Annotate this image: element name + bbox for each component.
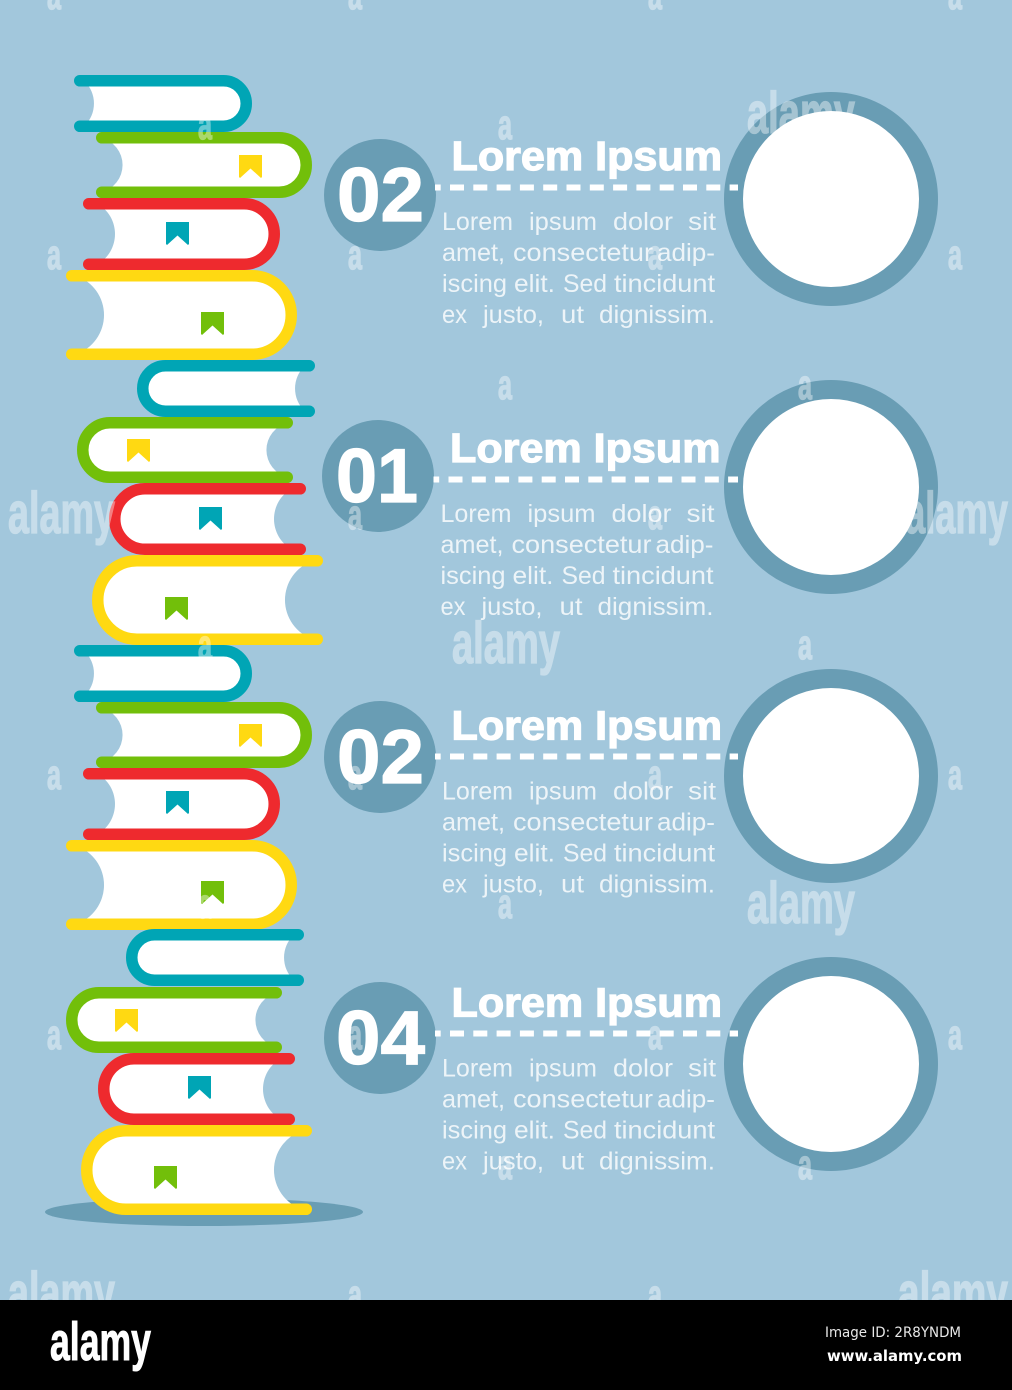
body text: Lorem (442, 208, 513, 236)
body text: Sed (563, 840, 607, 868)
watermarks: a (948, 751, 962, 798)
body text: consectetur (512, 531, 652, 559)
body text: consectetur (513, 1086, 653, 1114)
body text: elit. (514, 1116, 555, 1144)
body text: Lorem (440, 500, 512, 528)
body text: Sed (562, 562, 606, 590)
book: yellow 3 (72, 846, 291, 924)
bookmark icons (115, 155, 262, 1189)
body text: justo, (482, 301, 544, 329)
body text: elit. (512, 562, 554, 590)
step 4: 04 (324, 966, 928, 1176)
body text: Sed (563, 270, 607, 298)
watermarks: a (47, 1011, 61, 1058)
watermarks: alamy (747, 81, 855, 146)
body text: ex (442, 301, 467, 329)
watermarks: a (498, 101, 512, 148)
watermarks: a (47, 231, 61, 278)
body text: ex (440, 593, 466, 621)
watermarks: alamy (747, 871, 855, 936)
book: yellow 4 (87, 1131, 306, 1209)
body text: Sed (563, 1116, 607, 1144)
body text: justo, (480, 593, 542, 621)
body text: ipsum (528, 500, 596, 528)
heading: Lorem Ipsum (452, 980, 722, 1026)
footer bar (0, 1300, 1012, 1390)
body text: dolor (613, 1054, 673, 1082)
body text: tincidunt (614, 840, 715, 868)
number badge 02: 02 (337, 153, 424, 238)
watermarks: a (648, 231, 662, 278)
body text: iscing (442, 840, 507, 868)
step 3: 02 (324, 678, 928, 898)
body text: ut (561, 870, 584, 898)
watermarks: a (498, 880, 512, 927)
number badge 02 (324, 701, 436, 813)
book: green 4 (72, 993, 277, 1047)
book: green 2 (83, 423, 288, 477)
body text: sit (686, 500, 715, 528)
watermarks: a (648, 1011, 662, 1058)
body text: elit. (514, 270, 555, 298)
website: www.alamy.com (827, 1347, 962, 1365)
body text: amet, (442, 239, 505, 267)
number badge 02: 02 (337, 715, 424, 800)
dashed connector (435, 184, 738, 190)
watermarks: a (648, 491, 662, 538)
body text: adip- (657, 1086, 715, 1114)
body text: sit (688, 208, 716, 236)
body text: consectetur (513, 808, 653, 836)
watermarks: a (348, 1271, 362, 1318)
body text: sit (688, 1054, 716, 1082)
watermarks: alamy (452, 611, 560, 676)
body text: ut (560, 593, 583, 621)
book: teal 2 (143, 366, 309, 411)
body text: ipsum (529, 1054, 597, 1082)
watermarks: a (198, 101, 212, 148)
body text: tincidunt (614, 270, 715, 298)
number badge 01 (322, 420, 434, 532)
watermarks: a (948, 1011, 962, 1058)
body text: Lorem (442, 778, 513, 806)
number badge 02 (324, 139, 436, 251)
image id: Image ID: 2R8YNDM (825, 1325, 961, 1341)
body text: tincidunt (612, 562, 714, 590)
body text: dolor (612, 500, 672, 528)
body text: ex (442, 870, 467, 898)
watermarks: a (348, 751, 362, 798)
footer logo: alamy (50, 1312, 151, 1372)
book stack (72, 81, 317, 1209)
watermarks: a (348, 231, 362, 278)
watermarks: a (798, 621, 812, 668)
watermarks: a (198, 621, 212, 668)
body text: dignissim. (599, 301, 715, 329)
body text: dignissim. (598, 593, 714, 621)
book: red 1 (89, 204, 274, 264)
book: teal 3 (80, 651, 246, 696)
number badge 01: 01 (336, 434, 418, 519)
watermarks: a (498, 1141, 512, 1188)
body text: sit (688, 778, 716, 806)
book: red 3 (89, 774, 274, 834)
body text: consectetur (513, 239, 653, 267)
number badge 04 (324, 982, 436, 1094)
book stack shadow (45, 1198, 363, 1226)
body text: iscing (440, 562, 506, 590)
body text: tincidunt (614, 1116, 715, 1144)
watermarks: alamy (8, 481, 115, 546)
book: yellow 1 (72, 276, 291, 354)
step 2: 01 (322, 390, 928, 621)
watermarks: a (798, 361, 812, 408)
body text: amet, (440, 531, 504, 559)
watermarks: a (47, 751, 61, 798)
watermarks: a (648, 1271, 662, 1318)
body text: adip- (656, 531, 714, 559)
book: green 3 (101, 708, 306, 762)
body text: Lorem (442, 1054, 513, 1082)
number badge 04: 04 (336, 996, 425, 1081)
body text: justo, (482, 1148, 544, 1176)
watermarks: a (198, 880, 212, 927)
body text: adip- (657, 808, 715, 836)
body text: amet, (442, 808, 505, 836)
image placeholder ring (734, 390, 928, 584)
body text: amet, (442, 1086, 505, 1114)
body text: justo, (482, 870, 544, 898)
book: teal 4 (132, 935, 298, 980)
body text: dolor (613, 208, 673, 236)
book: red 4 (104, 1059, 289, 1119)
body text: ut (561, 1148, 584, 1176)
watermarks: a (198, 361, 212, 408)
book: yellow 2 (98, 561, 317, 639)
watermarks: a (348, 491, 362, 538)
body text: adip- (657, 239, 715, 267)
heading: Lorem Ipsum (450, 425, 720, 471)
watermarks: a (948, 231, 962, 278)
body text: elit. (514, 840, 555, 868)
watermarks: alamy (8, 1261, 115, 1326)
body text: dignissim. (599, 870, 715, 898)
dashed connector (434, 476, 738, 482)
step 1: 02 (324, 102, 928, 329)
watermarks: a (798, 1141, 812, 1188)
image placeholder ring (734, 102, 928, 296)
heading: Lorem Ipsum (452, 133, 722, 179)
dashed connector (435, 754, 738, 760)
body text: ipsum (529, 208, 597, 236)
book: teal 1 (80, 81, 246, 126)
body text: iscing (442, 270, 507, 298)
watermarks: a (498, 361, 512, 408)
book: red 2 (115, 489, 300, 549)
body text: dignissim. (599, 1148, 715, 1176)
watermarks: a (648, 751, 662, 798)
image placeholder ring (734, 678, 928, 874)
body text: ut (561, 301, 584, 329)
watermarks: a (198, 1141, 212, 1188)
body text: ex (442, 1148, 467, 1176)
body text: ipsum (529, 778, 597, 806)
watermarks: a (348, 1011, 362, 1058)
heading: Lorem Ipsum (452, 702, 722, 748)
body text: iscing (442, 1116, 507, 1144)
dashed connector (435, 1030, 738, 1036)
book: green 1 (101, 138, 306, 192)
body text: dolor (613, 778, 673, 806)
image placeholder ring (734, 966, 928, 1162)
